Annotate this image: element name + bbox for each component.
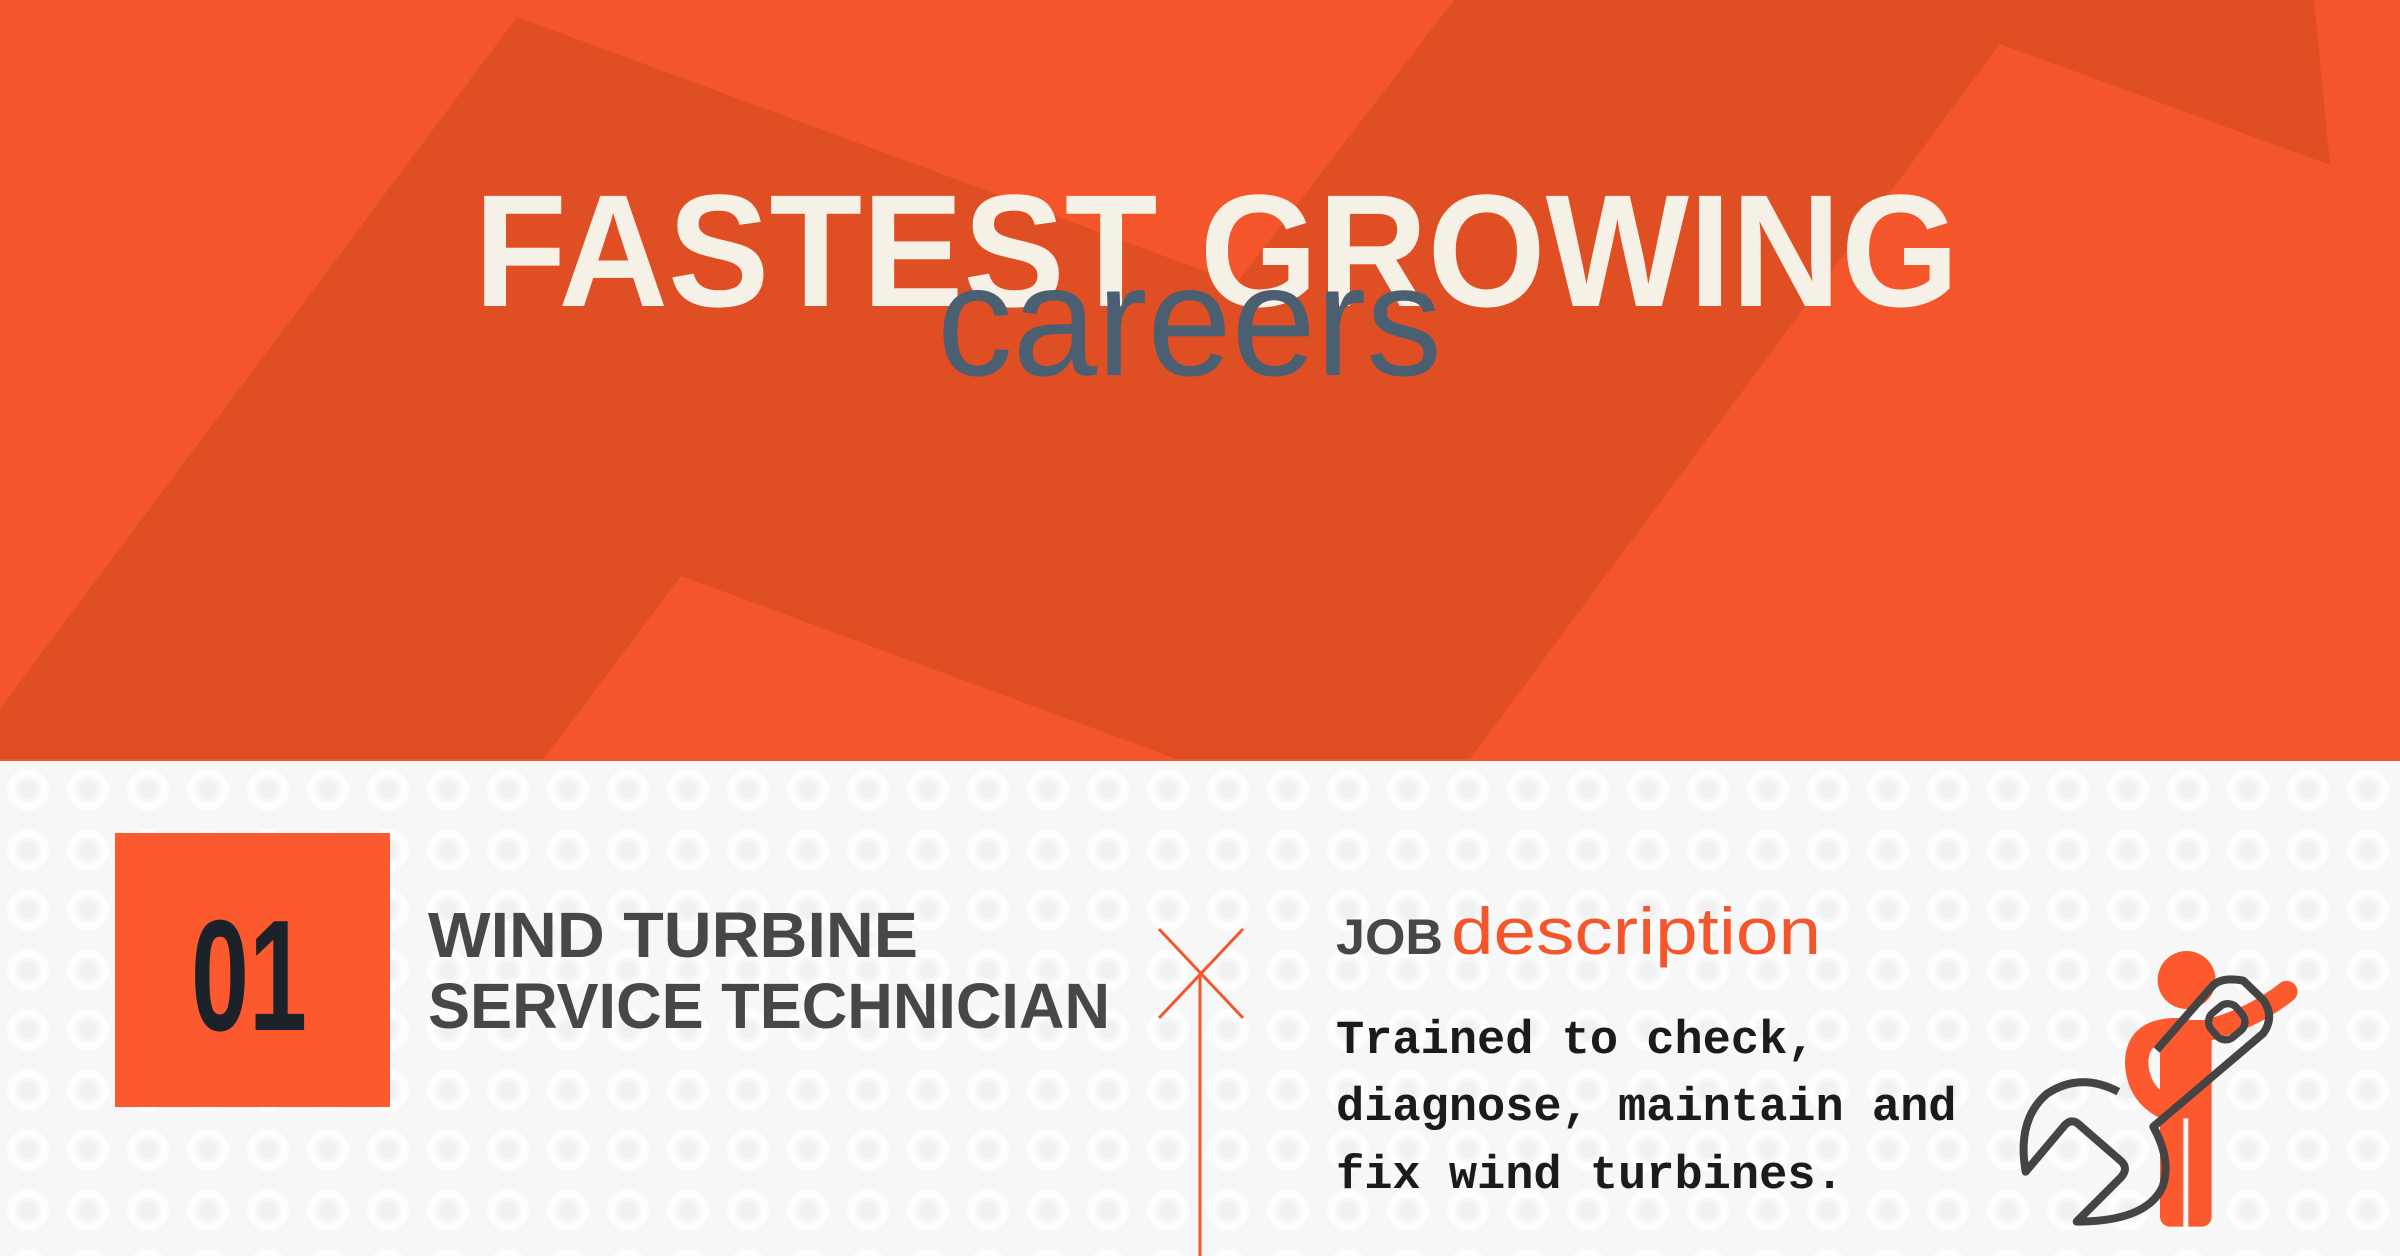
number box <box>115 833 390 1107</box>
job title: WIND TURBINE <box>428 899 918 971</box>
job description heading <box>1336 894 1821 968</box>
number box: 01 <box>191 888 307 1064</box>
job title <box>428 899 1110 1042</box>
divider cross marker <box>1159 929 1243 1256</box>
job description heading: description <box>1451 894 1821 968</box>
icon: technician with wrench <box>2024 951 2287 1228</box>
job description body: diagnose, maintain and <box>1336 1082 1957 1135</box>
subtitle: careers: careers <box>937 233 1442 409</box>
title <box>474 161 1959 409</box>
job description heading: JOB <box>1336 909 1443 965</box>
job title: SERVICE TECHNICIAN <box>428 970 1110 1042</box>
lower background pattern <box>0 759 2400 1256</box>
title: FASTEST GROWING <box>474 161 1959 340</box>
job description body: Trained to check, <box>1336 1015 1815 1068</box>
job description body <box>1336 1015 1957 1203</box>
header background <box>0 0 2400 760</box>
job description body: fix wind turbines. <box>1336 1150 1844 1203</box>
